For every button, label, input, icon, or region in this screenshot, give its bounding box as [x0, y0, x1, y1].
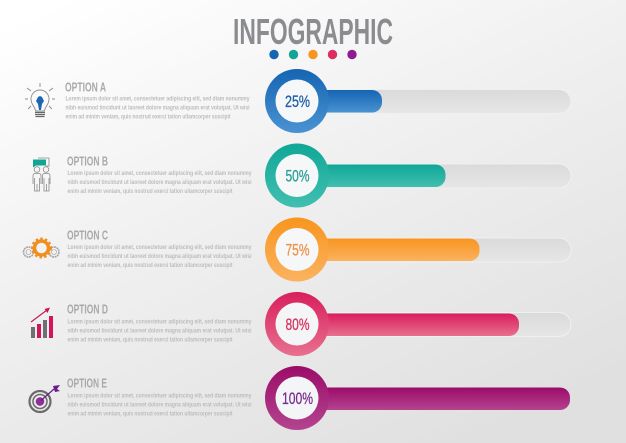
bar: option D	[265, 292, 571, 356]
panel: option A text: Lorem ipsum dolor sit amet, consectetuer adipiscing elit, sed diam nonummy	[66, 96, 250, 102]
panel: option B text: enim ad minim veniam, quis nostrud exerci tation ullamcorper suscipit	[68, 188, 233, 195]
icon: rising bar chart	[31, 308, 53, 338]
panel: option E text	[67, 376, 252, 418]
panel: option A text: nibh euismod tincidunt ut laoreet dolore magna aliquam erat volutpat. Ut wisi	[66, 104, 250, 112]
icon: light bulb	[25, 83, 55, 116]
bar: option E	[265, 366, 570, 430]
panel: option C text	[67, 228, 252, 269]
title: INFOGRAPHIC	[233, 11, 393, 52]
panel: option E text: Lorem ipsum dolor sit amet, consectetuer adipiscing elit, sed diam nonummy	[68, 392, 252, 400]
panel: option B text: OPTION B	[67, 154, 108, 168]
panel: option D text: OPTION D	[67, 302, 108, 316]
bar: option B: 50%	[286, 166, 310, 186]
panel: option B text: nibh euismod tincidunt ut laoreet dolore magna aliquam erat volutpat. Ut wisi	[68, 179, 252, 186]
panel: option C text: enim ad minim veniam, quis nostrud exerci tation ullamcorper suscipit	[68, 262, 233, 269]
bar: option E: 100%	[282, 389, 313, 408]
panel: option C text: nibh euismod tincidunt ut laoreet dolore magna aliquam erat volutpat. Ut wisi	[68, 253, 252, 260]
bar: option D: 80%	[286, 315, 310, 334]
panel: option C text: OPTION C	[67, 228, 108, 242]
icon: gears	[24, 238, 59, 258]
panel: option A text	[65, 80, 250, 120]
panel: option D text: nibh euismod tincidunt ut laoreet dolore magna aliquam erat volutpat. Ut wisi	[68, 328, 252, 334]
panel: option E text: enim ad minim veniam, quis nostrud exerci tation ullamcorper suscipit	[68, 410, 233, 418]
panel: option E text: OPTION E	[67, 376, 107, 390]
panel: option D text: Lorem ipsum dolor sit amet, consectetuer adipiscing elit, sed diam nonummy	[68, 318, 252, 326]
panel: option B text	[67, 154, 252, 195]
icon: two people with speech bubble	[33, 158, 50, 191]
panel: option B text: Lorem ipsum dolor sit amet, consectetuer adipiscing elit, sed diam nonummy	[68, 170, 252, 177]
panel: option A text: enim ad minim veniam, quis nostrud exerci tation ullamcorper suscipit	[66, 114, 231, 120]
bar: option A	[265, 69, 571, 133]
bar: option C	[265, 218, 571, 282]
panel: option E text: nibh euismod tincidunt ut laoreet dolore magna aliquam erat volutpat. Ut wisi	[68, 402, 252, 408]
bar: option C: 75%	[286, 240, 310, 260]
bar: option A: 25%	[285, 92, 310, 111]
icon: target with arrow	[30, 385, 60, 412]
panel: option D text	[67, 302, 252, 344]
panel: option C text: Lorem ipsum dolor sit amet, consectetuer adipiscing elit, sed diam nonummy	[68, 244, 252, 251]
panel: option D text: enim ad minim veniam, quis nostrud exerci tation ullamcorper suscipit	[68, 336, 233, 344]
panel: option A text: OPTION A	[65, 80, 106, 94]
title colour dots	[269, 50, 357, 59]
bar: option B	[265, 144, 571, 208]
